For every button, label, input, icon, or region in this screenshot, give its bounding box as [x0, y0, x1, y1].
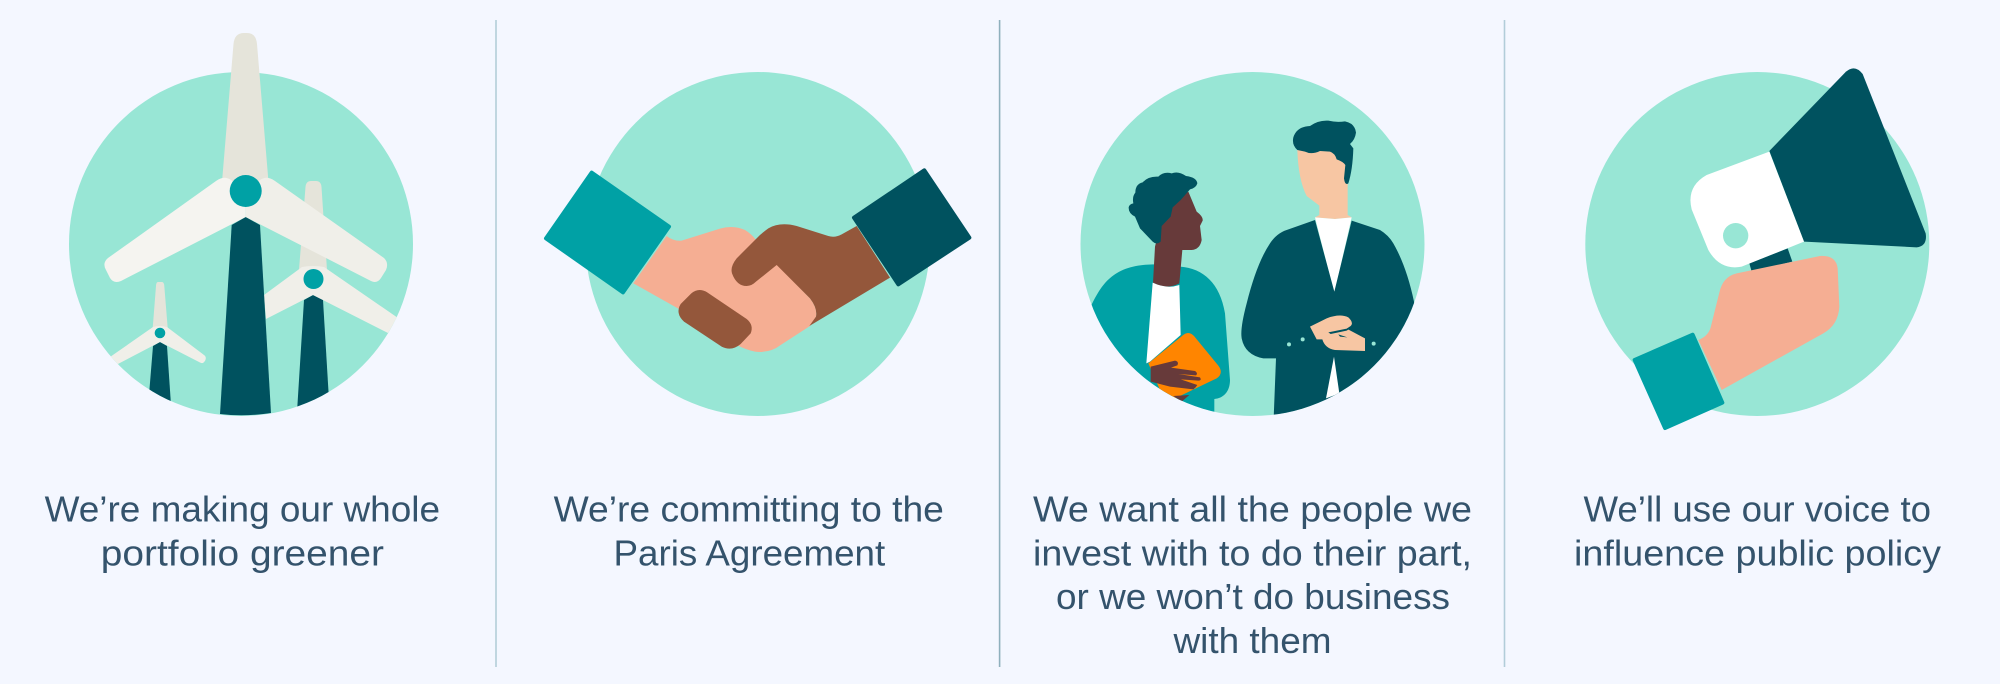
- text: Paris Agreement: [554, 489, 944, 574]
- text: portfolio greener: portfolio greener: [101, 533, 384, 574]
- text: investment partners: with them: [1172, 620, 1332, 661]
- icon: mint circle behind turbines: [69, 72, 413, 416]
- panel: handshake: [546, 72, 969, 416]
- panel: wind turbines: [69, 33, 413, 416]
- icon: mint circle behind handshake: [586, 72, 930, 416]
- icon: handshake: [546, 170, 969, 352]
- icon: megaphone in hand: [1635, 68, 1926, 428]
- text: investment partners: invest with to do their part,: [1033, 533, 1472, 574]
- panel: megaphone: [1585, 68, 1929, 428]
- text: investment partners: [1033, 489, 1472, 661]
- text: public policy: [1574, 489, 1941, 574]
- text: public policy: influence public policy: [1574, 533, 1941, 574]
- icon: small turbine: [110, 282, 206, 405]
- icon: mint circle behind megaphone: [1585, 72, 1929, 416]
- icon: medium turbine: [264, 181, 398, 412]
- text: public policy: We’ll use our voice to: [1584, 489, 1931, 530]
- text: Paris Agreement: We’re committing to the: [554, 489, 944, 530]
- icon: large turbine: [104, 33, 387, 415]
- icon: two business people: [1090, 121, 1427, 427]
- text: portfolio greener: We’re making our whole: [45, 489, 440, 530]
- text: investment partners: We want all the people we: [1033, 489, 1472, 530]
- text: Paris Agreement: Paris Agreement: [614, 533, 885, 574]
- panel: people: [1080, 72, 1427, 427]
- icon: mint circle behind people: [1080, 72, 1424, 416]
- text: investment partners: or we won’t do business: [1056, 576, 1450, 617]
- text: portfolio greener: [45, 489, 440, 574]
